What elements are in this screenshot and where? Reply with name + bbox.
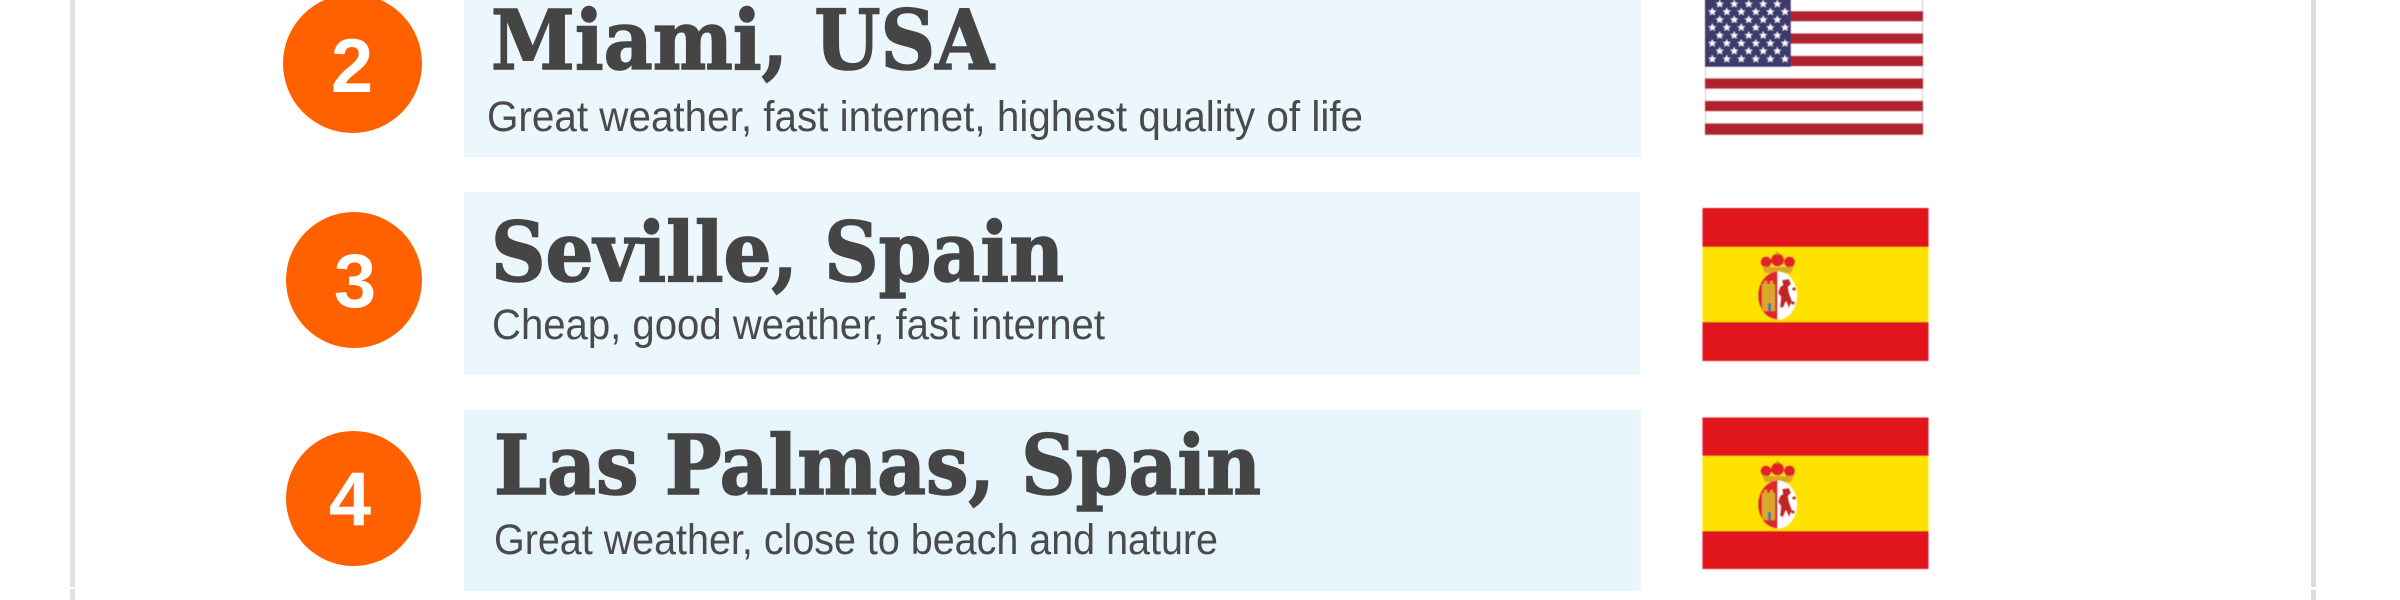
rank badge 3: 3 xyxy=(334,239,376,324)
panel border: right rule xyxy=(2311,0,2316,600)
row 2: Miami xyxy=(283,0,1923,157)
text panel: Miami xyxy=(464,0,1641,157)
description: Miami: Great weather, fast internet, highest quality of life xyxy=(487,93,1363,141)
icon: Spain flag xyxy=(1702,208,1928,361)
row 3: Seville xyxy=(286,192,1928,375)
description: Las Palmas: Great weather, close to beach and nature xyxy=(494,516,1218,564)
text panel: Las Palmas xyxy=(464,410,1641,591)
heading: Las Palmas, Spain: Las Palmas, Spain xyxy=(494,418,1261,514)
row 4: Las Palmas xyxy=(286,410,1928,591)
rank badge 4 xyxy=(286,431,421,566)
panel border: left rule xyxy=(70,0,75,600)
icon: USA flag xyxy=(1705,0,1923,135)
rank badge 2 xyxy=(283,0,422,133)
text panel: Seville xyxy=(464,192,1640,375)
rank badge 4: 4 xyxy=(329,457,371,542)
description: Seville: Cheap, good weather, fast internet xyxy=(492,301,1105,349)
rank badge 2: 2 xyxy=(331,24,373,109)
rank badge 3 xyxy=(286,212,422,348)
icon: Spain flag xyxy=(1702,418,1928,569)
heading: Seville, Spain: Seville, Spain xyxy=(491,205,1064,301)
